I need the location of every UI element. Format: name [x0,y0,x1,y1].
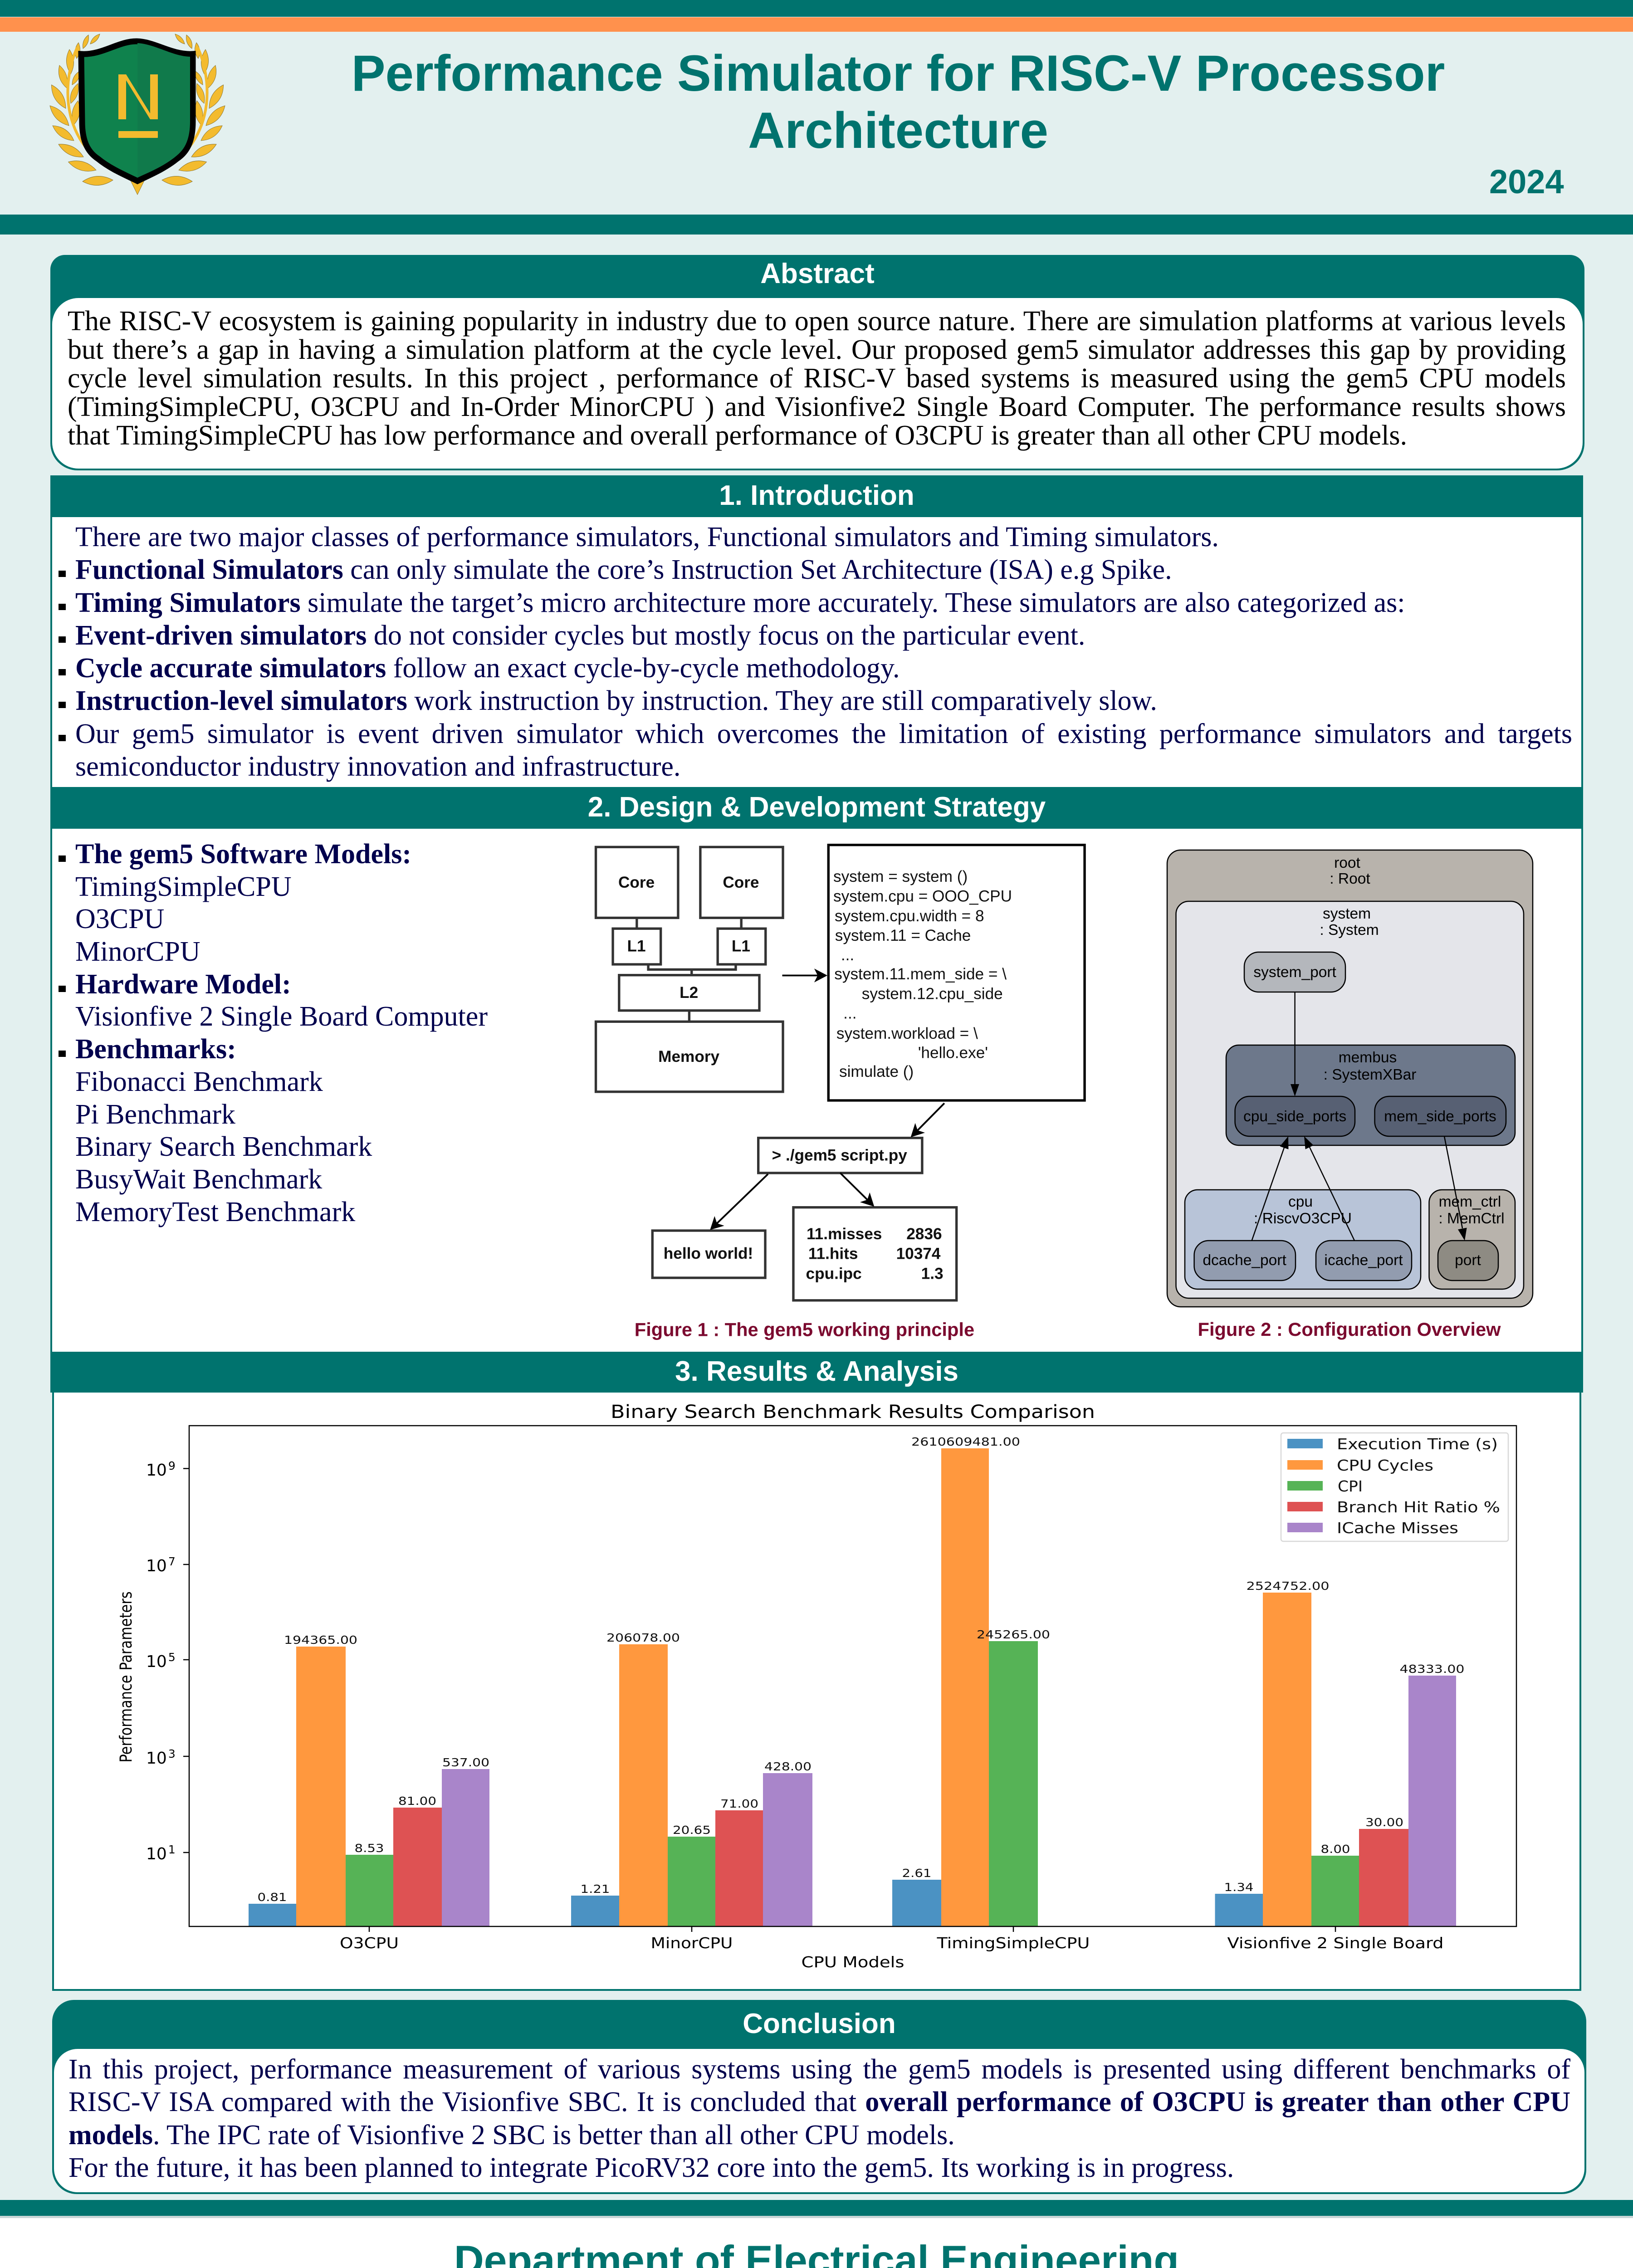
design list: Hardware Model: [75,969,291,1000]
figure 1: gem5 working principle diagram: Figure 1 : The gem5 working principle [635,1319,974,1340]
bar chart: binary search benchmark results: 245265.00 [977,1628,1050,1641]
introduction heading [50,475,1583,517]
design list: BusyWait Benchmark [75,1164,322,1195]
figure 2: configuration overview diagram: port [1455,1252,1481,1269]
panel: conclusion [52,2000,1586,2194]
figure 1: gem5 working principle diagram: system = system () [833,868,968,885]
chart legend: CPU Cycles [1337,1457,1433,1474]
figure 1: gem5 working principle diagram: ... [841,946,854,964]
conclusion text: In this project, performance measurement of various systems using the gem5 models is presented using different benchmarks of [68,2054,1570,2085]
figure 1: gem5 working principle diagram: 11.hits [808,1245,858,1263]
bar chart: binary search benchmark results: O3CPU [340,1934,399,1952]
bar chart: binary search benchmark results: 2610609481.00 [911,1435,1020,1448]
figure 1: gem5 working principle diagram: simulate () [839,1063,914,1080]
figure 1: gem5 working principle diagram: L1 [627,938,646,955]
bar chart: binary search benchmark results: CPU Models [801,1953,905,1971]
figure 1: gem5 working principle diagram: system.12.cpu_side [862,985,1003,1003]
figure 1: gem5 working principle diagram: L1 [732,938,750,955]
conclusion text: RISC-V ISA compared with the Visionfive SBC. It is concluded that overall performance of O3CPU is greater than other CPU [68,2087,1570,2117]
panel: abstract [50,255,1584,470]
figure 2: configuration overview diagram: root [1334,855,1361,871]
figure 1: gem5 working principle diagram: cpu.ipc [806,1265,862,1282]
figure 1: gem5 working principle diagram: system.11.mem_side = \ [834,965,1007,983]
bar chart: binary search benchmark results [54,1395,1579,1987]
figure 1: gem5 working principle diagram: ... [843,1004,857,1022]
bar chart: binary search benchmark results: 8.00 [1321,1843,1350,1856]
bar chart: binary search benchmark results: Visionfive 2 Single Board [1227,1934,1443,1952]
bar chart: binary search benchmark results: 1.34 [1224,1881,1254,1894]
chart legend: Execution Time (s) [1337,1435,1498,1453]
bar chart: binary search benchmark results: 428.00 [764,1760,812,1773]
figure 2: configuration overview diagram: dcache_port [1203,1252,1286,1269]
bar chart: binary search benchmark results: Performance Parameters [116,1591,136,1763]
conclusion text [68,2053,1570,2184]
figure 1: gem5 working principle diagram: 10374 [896,1245,941,1263]
bar chart: binary search benchmark results: 1 [168,1843,176,1856]
introduction text: Timing Simulators simulate the target’s micro architecture more accurately. These simulators are also categorized as: [75,587,1405,618]
title: Performance Simulator for RISC-V Processor [352,44,1445,102]
figure 1: gem5 working principle diagram: > ./gem5 script.py [772,1146,907,1164]
bar chart: binary search benchmark results: 3 [168,1747,176,1760]
figure 2: configuration overview diagram: membus [1339,1049,1397,1066]
figure 1: gem5 working principle diagram: Memory [658,1048,720,1066]
figure 2: configuration overview diagram: : SystemXBar [1324,1066,1416,1083]
bar chart: binary search benchmark results: 10 [146,1461,167,1480]
figure 1: gem5 working principle diagram: 2836 [906,1225,942,1243]
bar chart: binary search benchmark results: 194365.00 [284,1633,357,1647]
design list: MemoryTest Benchmark [75,1197,355,1227]
design heading: 2. Design & Development Strategy [588,792,1046,823]
abstract heading: Abstract [760,258,875,289]
figure 1: gem5 working principle diagram: L2 [680,984,698,1002]
introduction text: Our gem5 simulator is event driven simulator which overcomes the limitation of existing performance simulators and targets [75,719,1572,749]
band below header [0,215,1633,235]
bar chart: binary search benchmark results: 1.21 [581,1882,610,1896]
conclusion heading: Conclusion [743,2008,896,2039]
year: 2024 [1489,163,1564,200]
footer band [0,2200,1633,2216]
bar chart: binary search benchmark results: 7 [168,1555,176,1568]
figure 1: gem5 working principle diagram: system.cpu = OOO_CPU [833,887,1012,905]
department banner [0,2218,1633,2268]
figure 1: gem5 working principle diagram: Core [618,874,655,891]
design list: Binary Search Benchmark [75,1131,372,1162]
bar chart: binary search benchmark results: 8.53 [355,1842,384,1855]
title [263,44,1533,159]
conclusion text: For the future, it has been planned to integrate PicoRV32 core into the gem5. Its working is in progress. [68,2152,1234,2183]
design list: MinorCPU [75,936,200,967]
panel: introduction [50,475,1583,787]
design list: Benchmarks: [75,1034,236,1065]
introduction text: Functional Simulators can only simulate the core’s Instruction Set Architecture (ISA) e.g Spike. [75,554,1172,585]
bar chart: binary search benchmark results: 9 [168,1459,176,1472]
chart legend: CPI [1338,1477,1363,1495]
figure 1: gem5 working principle diagram: system.workload = \ [836,1025,978,1042]
figure 1: gem5 working principle diagram: 11.misses [807,1225,882,1243]
bar chart: binary search benchmark results: 30.00 [1365,1816,1403,1829]
figure 2: configuration overview diagram: icache_port [1324,1252,1403,1269]
header band: top teal and orange stripes [0,0,1633,32]
chart legend: ICache Misses [1337,1519,1458,1537]
design list: O3CPU [75,904,164,934]
design list: TimingSimpleCPU [75,871,292,902]
figure 2: configuration overview diagram: : MemCtrl [1438,1210,1505,1227]
introduction heading: 1. Introduction [719,480,914,511]
introduction text: Event-driven simulators do not consider cycles but mostly focus on the particular event. [75,620,1085,651]
design list: Fibonacci Benchmark [75,1066,323,1097]
abstract text: cycle level simulation results. In this project , performance of RISC-V based systems is measured using the gem5 CPU models [68,363,1566,394]
results heading: 3. Results & Analysis [675,1356,958,1387]
figure 1: gem5 working principle diagram: Core [723,874,759,891]
bar chart: binary search benchmark results: MinorCPU [650,1934,733,1952]
figure 1: gem5 working principle diagram [567,816,1111,1350]
figure 2: configuration overview diagram: Figure 2 : Configuration Overview [1198,1319,1501,1340]
chart title: Binary Search Benchmark Results Comparison [611,1402,1095,1422]
figure 2: configuration overview diagram [1134,816,1579,1350]
figure 2: configuration overview diagram: system_port [1253,964,1337,981]
figure 2: configuration overview diagram: : RiscvO3CPU [1254,1210,1352,1227]
figure 1: gem5 working principle diagram: system.11 = Cache [835,927,971,944]
abstract text: that TimingSimpleCPU has low performance and overall performance of O3CPU is greater than all other CPU models. [68,420,1407,451]
bar chart: binary search benchmark results: 20.65 [673,1823,711,1837]
abstract text: but there’s a gap in having a simulation platform at the cycle level. Our proposed gem5 simulator addresses this gap by providing [68,334,1566,365]
introduction text [75,521,1572,783]
design list: The gem5 Software Models: [75,839,411,870]
design list: Visionfive 2 Single Board Computer [75,1001,488,1032]
panel: design and development strategy [50,787,1583,1352]
results body frame [52,1392,1581,1991]
panel: results and analysis [50,1352,1583,1991]
introduction text: semiconductor industry innovation and infrastructure. [75,751,680,782]
bar chart: binary search benchmark results: 206078.00 [606,1631,680,1644]
figure 1: gem5 working principle diagram: 1.3 [921,1265,944,1282]
abstract text [68,307,1566,450]
bar chart: binary search benchmark results: 81.00 [398,1794,436,1808]
figure 2: configuration overview diagram: cpu [1288,1193,1313,1210]
figure 1: gem5 working principle diagram: hello world! [664,1245,753,1262]
bar chart: binary search benchmark results: 2524752.00 [1247,1579,1329,1593]
design heading [50,787,1583,829]
chart legend: Branch Hit Ratio % [1337,1498,1500,1516]
bar chart: binary search benchmark results: 10 [146,1652,167,1671]
figure 1: gem5 working principle diagram: system.cpu.width = 8 [835,907,984,925]
figure 2: configuration overview diagram: system [1323,905,1371,922]
title: Architecture [748,102,1048,159]
bar chart: binary search benchmark results: 537.00 [442,1756,489,1769]
figure 2: configuration overview diagram: : Root [1330,870,1370,887]
introduction text: There are two major classes of performance simulators, Functional simulators and Timing simulators. [75,522,1219,552]
icon: university shield logo with laurel wreath [45,32,227,197]
abstract text: (TimingSimpleCPU, O3CPU and In-Order MinorCPU ) and Visionfive2 Single Board Computer. The performance results shows [68,391,1566,422]
bar chart: binary search benchmark results: 10 [146,1845,167,1863]
bar chart: binary search benchmark results: 2.61 [902,1867,932,1880]
abstract body box [52,298,1583,469]
bar chart: binary search benchmark results: 10 [146,1557,167,1575]
introduction text: Instruction-level simulators work instruction by instruction. They are still comparatively slow. [75,685,1157,716]
figure 1: gem5 working principle diagram: 'hello.exe' [918,1044,988,1062]
bar chart: binary search benchmark results: TimingSimpleCPU [936,1934,1090,1952]
bar chart: binary search benchmark results: 10 [146,1749,167,1768]
design list [75,838,574,1228]
bar chart: binary search benchmark results: 5 [168,1651,176,1664]
figure 2: configuration overview diagram: mem_ctrl [1439,1193,1501,1210]
bar chart: binary search benchmark results: 71.00 [720,1797,758,1810]
figure 2: configuration overview diagram: mem_side_ports [1384,1108,1496,1125]
chart legend [1281,1433,1508,1541]
introduction text: Cycle accurate simulators follow an exact cycle-by-cycle methodology. [75,653,900,684]
bar chart: binary search benchmark results: 48333.00 [1400,1662,1464,1676]
figure 2: configuration overview diagram: : System [1320,922,1379,938]
figure 2: configuration overview diagram: cpu_side_ports [1243,1108,1346,1125]
bar chart: binary search benchmark results: 0.81 [258,1891,287,1904]
abstract text: The RISC-V ecosystem is gaining popularity in industry due to open source nature. There are simulation platforms at various levels [68,306,1566,337]
results heading [50,1352,1583,1393]
conclusion text: models. The IPC rate of Visionfive 2 SBC is better than all other CPU models. [68,2120,955,2151]
design list: Pi Benchmark [75,1099,235,1129]
conclusion body box [54,2049,1584,2192]
